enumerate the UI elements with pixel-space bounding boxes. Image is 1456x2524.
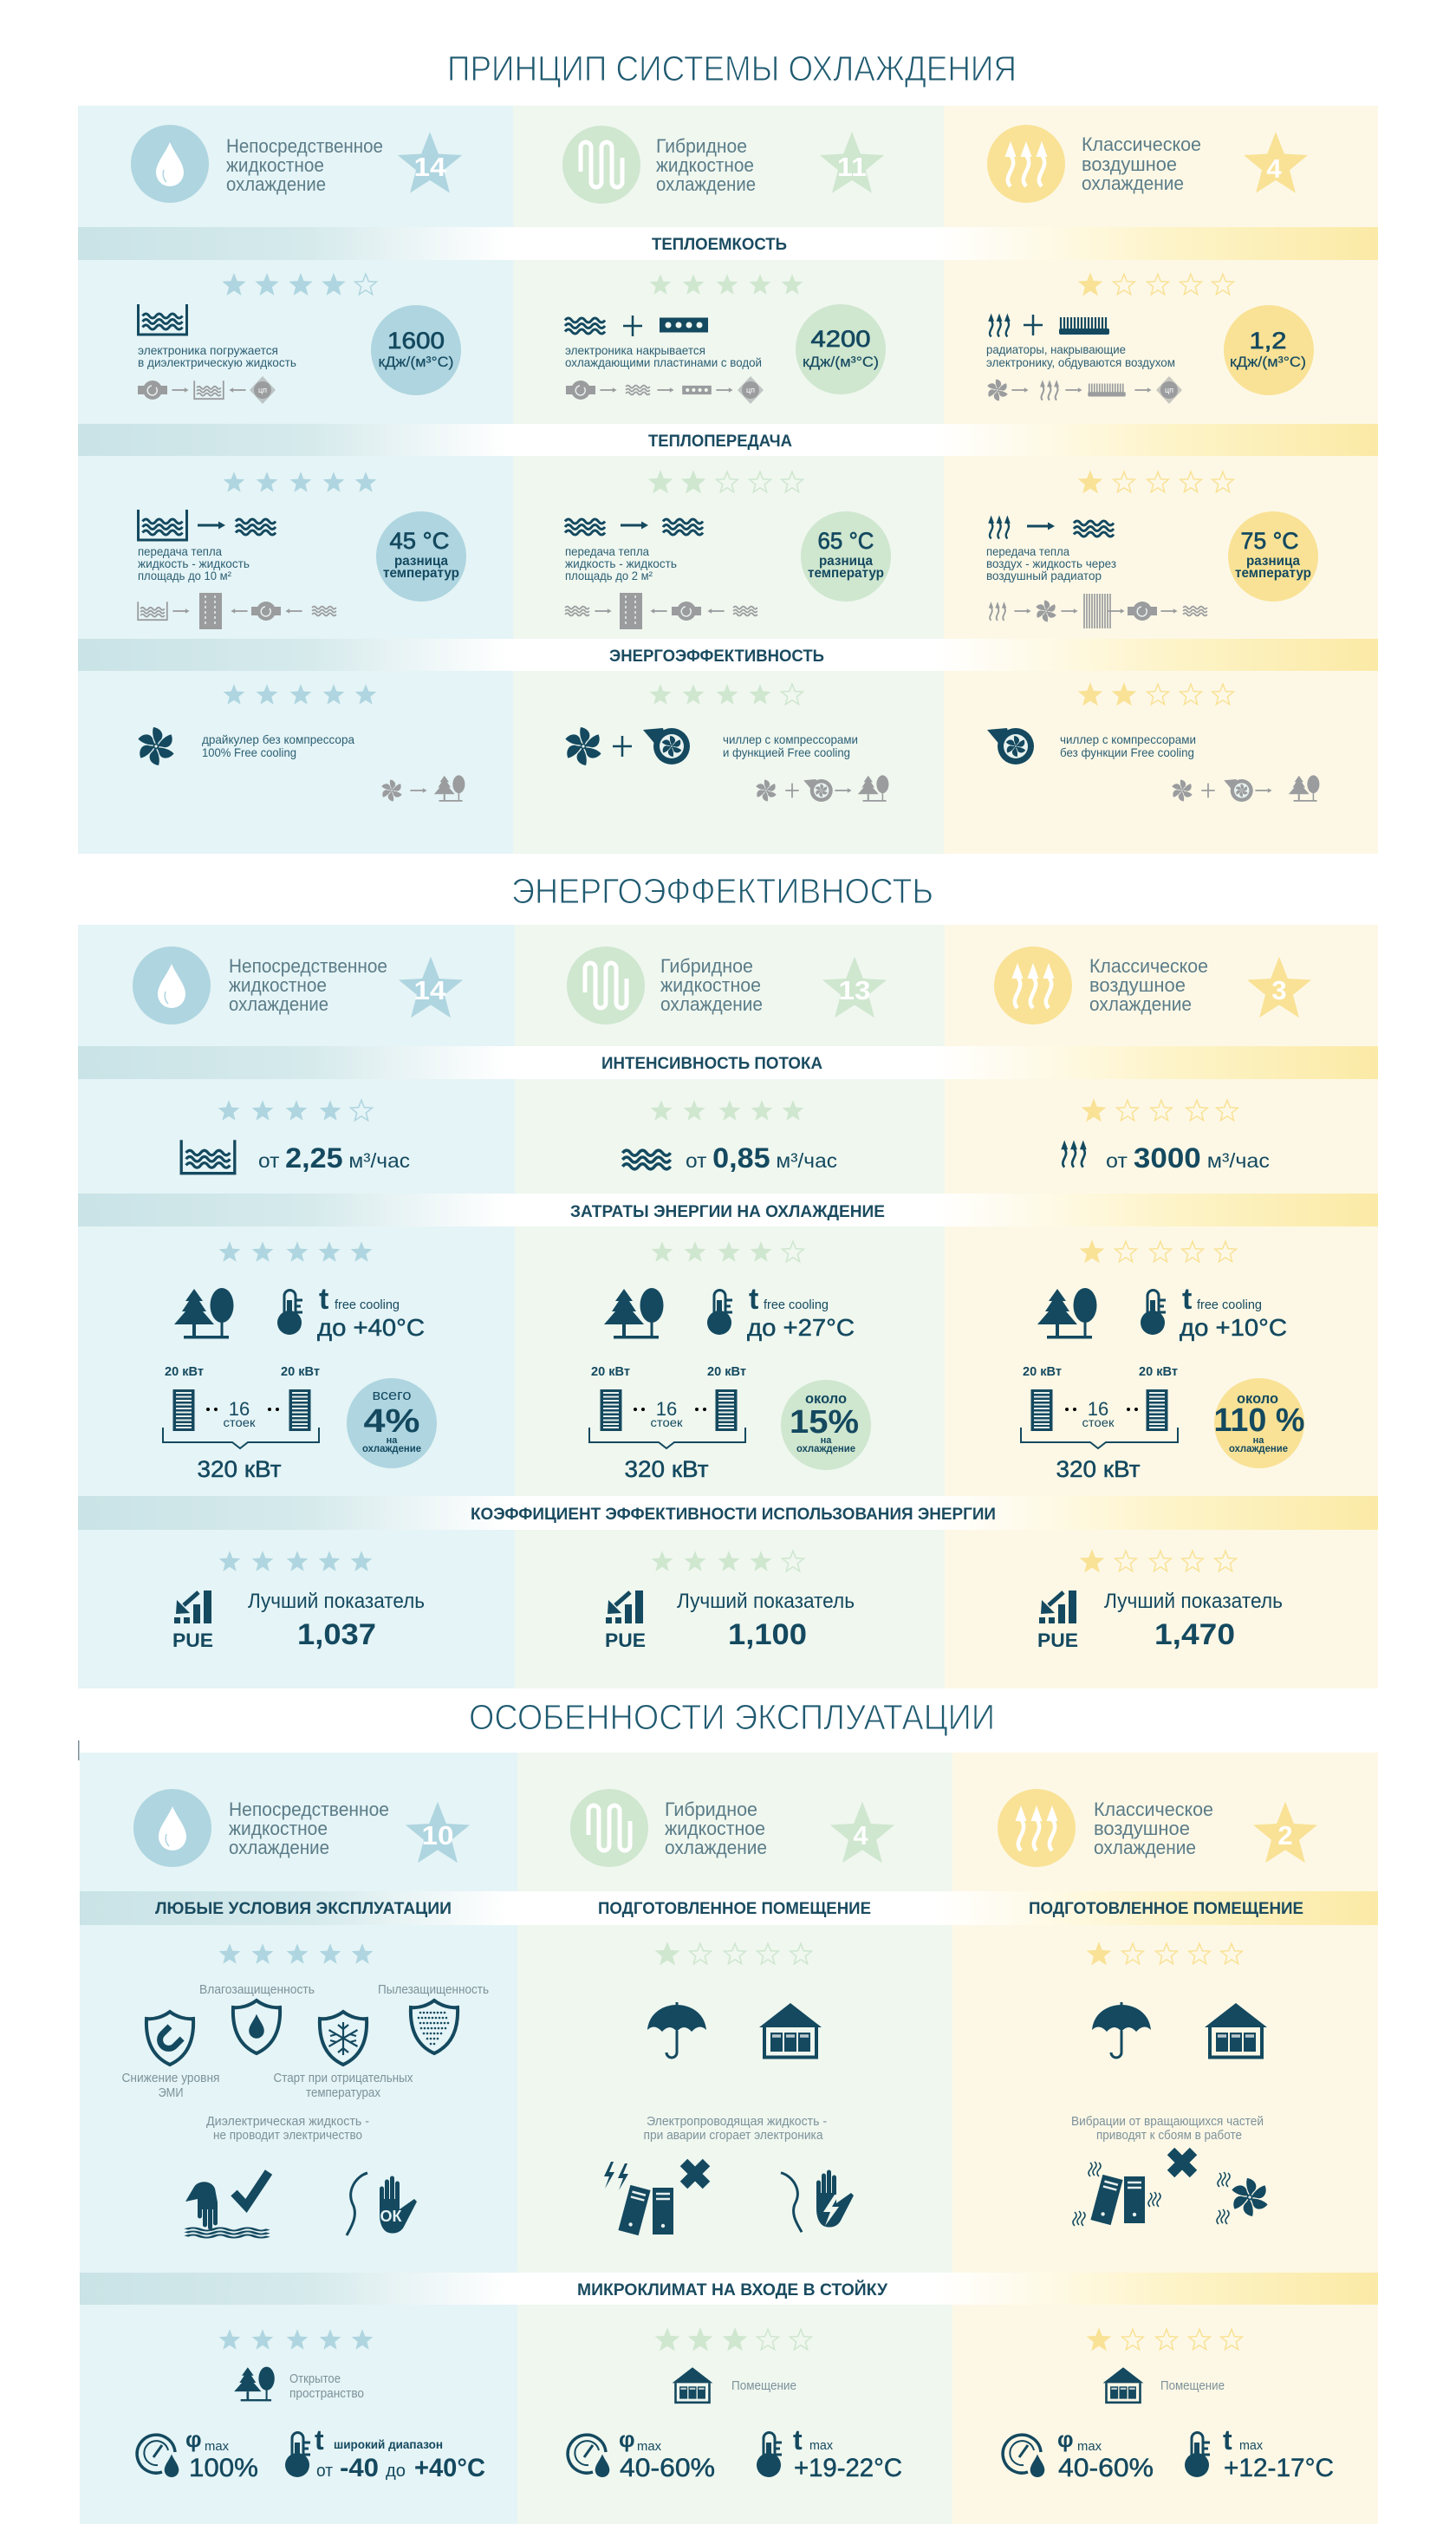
direct: protection shields: температурах (306, 2085, 380, 2100)
direct: protection shields: Влагозащищенность (199, 1982, 315, 1997)
direct: protection shields: Старт при отрицательных (274, 2071, 413, 2085)
rating stars: heat transfer direct 5 of 5 (224, 472, 376, 492)
direct: heat transfer description (138, 510, 276, 582)
rating stars: cost direct 5 of 5 (219, 1241, 372, 1262)
air: vibration note: приводят к сбоям в работе (1096, 2128, 1242, 2143)
hybrid: chiller with free cooling description: чиллер с компрессорами (723, 732, 858, 746)
panel background: classic air cooling column (944, 106, 1378, 854)
hybrid: cold plate description: охлаждающими пластинами с водой (565, 355, 762, 369)
band: rack inlet microclimate: МИКРОКЛИМАТ НА ВХОДЕ В СТОЙКУ (577, 2280, 887, 2300)
direct: drycooler description (136, 727, 354, 765)
header: hybrid liquid cooling, score 4: 4 (853, 1820, 868, 1851)
direct: heat capacity value circle (371, 305, 461, 395)
air: radiator description: электронику, обдуваются воздухом (986, 355, 1175, 369)
air: flow diagram: цп (1165, 386, 1173, 394)
direct: immersion description: электроника погружается (138, 343, 278, 357)
hybrid: cooling share circle: около (805, 1390, 847, 1407)
hybrid: heat capacity value circle: 4200 (811, 326, 870, 352)
direct: racks diagram: 16 (229, 1398, 250, 1420)
hybrid: heat transfer description (565, 519, 703, 582)
direct: protection shields (121, 1982, 489, 2100)
hybrid: conductive liquid note: при аварии сгорает электроника (643, 2128, 823, 2143)
air: vibration note: Вибрации от вращающихся частей (1071, 2114, 1264, 2129)
header: classic air cooling, score 3: 3 (1271, 975, 1287, 1005)
air: racks diagram: 16 (1088, 1398, 1108, 1420)
hybrid: chiller with free cooling description: и функцией Free cooling (723, 745, 850, 759)
direct: cooling share circle: всего (373, 1387, 411, 1403)
band: energy efficiency: ЭНЕРГОЭФФЕКТИВНОСТЬ (609, 647, 824, 666)
air: room location (1103, 2367, 1225, 2403)
direct: protection shields: Пылезащищенность (378, 1982, 489, 1997)
hybrid: humidity value: 40-60% (620, 2454, 715, 2482)
direct: temperature range value: t (315, 2424, 324, 2456)
panel: cooling principle (78, 106, 1378, 854)
direct: temperature range value (285, 2424, 485, 2482)
direct: flow diagram: цп (258, 386, 267, 394)
direct: PUE value: 1,037 (297, 1618, 376, 1651)
air: heat capacity value circle: кДж/(м³°C) (1230, 354, 1306, 370)
rating stars: conditions direct 5 of 5 (219, 1943, 373, 1964)
rating stars: conditions hybrid 1 of 5 (657, 1943, 811, 1964)
air: PUE value: 1,470 (1154, 1618, 1235, 1651)
header: direct liquid cooling, score 14: 14 (414, 152, 446, 182)
air: cooling share circle (1213, 1378, 1305, 1468)
hybrid: humidity value: φ (619, 2426, 635, 2452)
air: cooling share circle: на (1253, 1435, 1264, 1446)
band: operating conditions: ПОДГОТОВЛЕННОЕ ПОМЕЩЕНИЕ (1029, 1900, 1303, 1918)
rating stars: flow direct 4 of 5 (218, 1100, 372, 1121)
air: racks diagram: 20 кВт (1139, 1364, 1178, 1379)
rating stars: flow hybrid 5 of 5 (651, 1100, 803, 1121)
header: hybrid liquid cooling, score 4: Гибридное (665, 1799, 757, 1820)
direct: protection shields: ЭМИ (158, 2085, 184, 2100)
direct: heat capacity value circle: кДж/(м³°C) (378, 354, 454, 370)
direct: dielectric note: не проводит электричество (213, 2128, 362, 2143)
hybrid: cold plate description (565, 316, 762, 369)
air: free cooling temperature: t (1182, 1283, 1192, 1316)
rating stars: heat transfer air 1 of 5 (1080, 472, 1233, 492)
rating stars: flow air 1 of 5 (1083, 1100, 1238, 1121)
header: direct liquid cooling, score 10: жидкостное (229, 1818, 328, 1839)
rating stars: microclimate direct 5 of 5 (219, 2329, 373, 2350)
band: flow intensity: ИНТЕНСИВНОСТЬ ПОТОКА (601, 1055, 822, 1073)
rating stars: energy hybrid 4 of 5 (650, 684, 803, 705)
band: heat transfer (78, 424, 1378, 456)
hybrid: temperature value: t (793, 2424, 803, 2456)
direct: drycooler description: 100% Free cooling (202, 745, 296, 759)
air: heat transfer description: воздух - жидкость через (986, 556, 1116, 570)
icon: moisture shield with drop (233, 2000, 280, 2053)
rating stars: microclimate air 1 of 5 (1089, 2329, 1242, 2350)
header: classic air cooling, score 3: охлаждение (1089, 993, 1192, 1015)
rating stars: PUE direct 5 of 5 (219, 1551, 372, 1571)
air: temperature difference circle: температур (1235, 566, 1311, 581)
hybrid: heat capacity value circle (796, 304, 886, 394)
rating stars: cost air 1 of 5 (1082, 1241, 1236, 1262)
direct: heat transfer flow diagram (138, 593, 336, 629)
direct: PUE value: Лучший показатель (248, 1590, 425, 1613)
rating stars: energy air 2 of 5 (1080, 684, 1233, 705)
direct: temperature difference circle: разница (394, 554, 448, 569)
air: racks diagram: 20 кВт (1023, 1364, 1062, 1379)
air: heat capacity value circle: 1,2 (1250, 328, 1286, 354)
air: temperature difference circle: 75 °C (1241, 528, 1298, 554)
hybrid: racks diagram: 320 кВт (624, 1456, 709, 1482)
panel background: classic air cooling column (952, 1753, 1378, 2524)
direct: free cooling temperature: до +40°C (317, 1314, 425, 1341)
direct: temperature difference circle: температур (383, 566, 459, 581)
air: cooling share circle: около (1237, 1390, 1278, 1407)
direct: cooling share circle: на (387, 1435, 398, 1446)
hybrid: racks diagram: стоек (650, 1415, 683, 1429)
hybrid: cooling share circle: на (821, 1435, 832, 1446)
header: hybrid liquid cooling, score 11: Гибридное (656, 135, 747, 157)
air: humidity value: 40-60% (1058, 2454, 1154, 2482)
header: hybrid liquid cooling, score 13: 13 (839, 975, 870, 1005)
hybrid: conductive liquid note: Электропроводящая жидкость - (647, 2114, 827, 2129)
hybrid: flow rate (622, 1142, 837, 1174)
header: hybrid liquid cooling, score 13: Гибридное (660, 955, 753, 977)
hybrid: racks diagram: 20 кВт (707, 1364, 746, 1379)
direct: temperature difference circle (376, 511, 466, 602)
hybrid: heat transfer flow diagram (565, 593, 757, 629)
panel background: direct liquid cooling column (78, 925, 515, 1688)
hybrid: temperature value: +19-22°C (794, 2454, 902, 2482)
air: humidity value: φ (1057, 2426, 1074, 2452)
direct: open space location: пространство (289, 2386, 364, 2401)
direct: heat capacity value circle: 1600 (387, 328, 445, 354)
air: cooling share circle: 110 % (1213, 1402, 1305, 1439)
header: classic air cooling, score 3 (994, 946, 1311, 1025)
air: chiller description: без функции Free cooling (1060, 745, 1194, 759)
header: hybrid liquid cooling, score 11: охлаждение (656, 173, 756, 195)
air: racks diagram: 320 кВт (1056, 1456, 1141, 1482)
band: operating conditions: ЛЮБЫЕ УСЛОВИЯ ЭКСПЛУАТАЦИИ (155, 1900, 452, 1918)
air: flow rate: от 3000 м³/час (1106, 1142, 1270, 1174)
air: temperature value: +12-17°C (1224, 2454, 1334, 2482)
direct: humidity value (137, 2426, 258, 2482)
header: direct liquid cooling, score 10: 10 (421, 1820, 454, 1851)
direct: open space location (234, 2367, 364, 2401)
hybrid: temperature value (757, 2424, 902, 2482)
direct: temperature range value: -40 (340, 2454, 379, 2482)
rating stars: cost hybrid 4 of 5 (652, 1241, 803, 1262)
direct: immersion description (138, 304, 296, 369)
rating stars: heat transfer hybrid 2 of 5 (650, 472, 803, 492)
rating stars: PUE air 1 of 5 (1082, 1551, 1236, 1571)
direct: temperature range value: +40°C (414, 2454, 485, 2482)
rating stars: conditions air 1 of 5 (1089, 1943, 1242, 1964)
band: heat capacity: ТЕПЛОЕМКОСТЬ (652, 236, 787, 254)
band: power usage effectiveness: КОЭФФИЦИЕНТ ЭФФЕКТИВНОСТИ ИСПОЛЬЗОВАНИЯ ЭНЕРГИИ (471, 1506, 996, 1524)
band: power usage effectiveness (78, 1496, 1378, 1530)
direct: dielectric note: Диэлектрическая жидкость - (206, 2114, 369, 2129)
hybrid: heat transfer description: площадь до 2 м² (565, 569, 653, 582)
panel background: hybrid liquid cooling column (513, 106, 944, 854)
direct: free cooling temperature (174, 1283, 425, 1341)
direct: cable and safe hand: ОК (380, 2208, 403, 2225)
header: classic air cooling, score 2 (998, 1789, 1317, 1867)
header: classic air cooling, score 3: Классическое (1089, 955, 1208, 977)
direct: free cooling temperature: t (319, 1283, 328, 1316)
band: cooling energy cost (78, 1194, 1378, 1226)
direct: drycooler description: драйкулер без компрессора (202, 732, 354, 746)
hybrid: free cooling temperature: t (749, 1283, 758, 1316)
direct: hand in liquid with check mark (185, 2172, 269, 2238)
header: direct liquid cooling, score 10 (133, 1789, 470, 1867)
hybrid: energy flow diagram (755, 775, 888, 802)
direct: immersion description: в диэлектрическую жидкость (138, 355, 296, 369)
header: direct liquid cooling, score 14: 14 (414, 975, 446, 1005)
rating stars: heat capacity air 1 of 5 (1080, 274, 1233, 295)
air: heat transfer flow diagram (989, 594, 1207, 628)
hybrid: free cooling temperature: до +27°C (747, 1314, 855, 1341)
panel: energy efficiency (78, 925, 1378, 1688)
hybrid: cooling share circle: 15% (790, 1404, 859, 1441)
header: direct liquid cooling, score 14: жидкостное (229, 974, 327, 996)
band: energy efficiency (78, 639, 1378, 671)
hybrid: temperature value: max (809, 2438, 833, 2453)
hybrid: cooling share circle: охлаждение (796, 1442, 855, 1454)
air: radiator description: радиаторы, накрывающие (986, 342, 1126, 356)
direct: dielectric note (206, 2114, 369, 2143)
air: flow diagram (986, 376, 1182, 404)
band: heat transfer: ТЕПЛОПЕРЕДАЧА (648, 433, 792, 451)
hybrid: flow diagram (566, 376, 764, 404)
hybrid: PUE value: 1,100 (728, 1618, 807, 1651)
header: classic air cooling, score 4: воздушное (1082, 153, 1177, 175)
direct: protection shields: Снижение уровня (121, 2071, 220, 2085)
hybrid: cold plate description: электроника накрывается (565, 343, 705, 357)
hybrid: humidity value: max (637, 2439, 661, 2454)
header: classic air cooling, score 2: охлаждение (1094, 1837, 1196, 1858)
hybrid: PUE value (605, 1590, 855, 1651)
hybrid: cooling share circle (781, 1380, 871, 1470)
band: flow intensity (78, 1046, 1378, 1079)
air: humidity value: max (1077, 2439, 1102, 2454)
direct: flow rate (181, 1140, 410, 1174)
air: humidity value (1003, 2426, 1154, 2482)
hybrid: burning servers with cross (604, 2162, 706, 2235)
hybrid: humidity value (568, 2426, 715, 2482)
direct: cooling share circle: 4% (364, 1403, 419, 1440)
air: radiator description (986, 313, 1175, 369)
air: umbrella and house icons (1092, 2002, 1267, 2058)
hybrid: racks diagram (589, 1364, 746, 1482)
air: heat transfer description: передача тепла (986, 544, 1069, 558)
band: heat capacity (78, 227, 1378, 260)
panel background: hybrid liquid cooling column (517, 1753, 952, 2524)
hybrid: conductive liquid note (643, 2114, 827, 2143)
rating stars: PUE hybrid 4 of 5 (652, 1551, 803, 1571)
panel background: direct liquid cooling column (80, 1753, 517, 2524)
header: classic air cooling, score 4: 4 (1266, 153, 1282, 184)
hybrid: PUE value: PUE (605, 1630, 646, 1651)
direct: flow diagram (138, 376, 276, 404)
air: temperature difference circle: разница (1246, 554, 1300, 569)
direct: flow rate: от 2,25 м³/час (258, 1142, 410, 1174)
hybrid: temperature difference circle (801, 511, 891, 602)
direct: temperature range value: до (386, 2462, 406, 2481)
direct: heat transfer description: передача тепла (138, 544, 222, 558)
air: chiller description: чиллер с компрессорами (1060, 732, 1196, 746)
direct: racks diagram: 20 кВт (281, 1364, 320, 1379)
header: direct liquid cooling, score 14: охлаждение (226, 173, 326, 195)
direct: PUE value (172, 1590, 425, 1651)
air: energy flow diagram (1171, 775, 1319, 802)
air: racks diagram (1021, 1364, 1178, 1482)
hybrid: racks diagram: 16 (656, 1398, 677, 1420)
panel: operating features (80, 1753, 1378, 2524)
air: free cooling temperature: free cooling (1197, 1298, 1262, 1312)
header: classic air cooling, score 3: воздушное (1089, 974, 1186, 996)
air: PUE value: Лучший показатель (1104, 1590, 1283, 1613)
hybrid: temperature difference circle: температур (808, 566, 884, 581)
air: temperature difference circle (1228, 511, 1318, 602)
hybrid: chiller with free cooling description (563, 727, 858, 765)
direct: cable and safe hand (347, 2173, 417, 2235)
band: operating conditions (80, 1891, 1378, 1925)
header: hybrid liquid cooling, score 4 (570, 1789, 894, 1867)
header: direct liquid cooling, score 14: Непосредственное (229, 955, 387, 977)
direct: racks diagram: 20 кВт (165, 1364, 204, 1379)
header: hybrid liquid cooling, score 13: жидкостное (660, 974, 761, 996)
header: direct liquid cooling, score 14: жидкостное (226, 154, 324, 176)
air: heat transfer description: воздушный радиатор (986, 569, 1102, 582)
direct: open space location: Открытое (289, 2371, 341, 2386)
direct: heat transfer description: жидкость - жидкость (138, 556, 250, 570)
rating stars: microclimate hybrid 3 of 5 (657, 2329, 811, 2350)
air: vibration note (1071, 2114, 1264, 2143)
rating stars: heat capacity direct 4 of 5 (224, 274, 376, 295)
air: heat capacity value circle (1224, 305, 1314, 395)
direct: cooling share circle: охлаждение (362, 1442, 421, 1454)
panel background: classic air cooling column (945, 925, 1378, 1688)
panel background: direct liquid cooling column (78, 106, 513, 854)
air: racks diagram: стоек (1082, 1415, 1115, 1429)
hybrid: heat capacity value circle: кДж/(м³°C) (803, 354, 879, 370)
icon: dust shield with dots (411, 2000, 458, 2053)
air: temperature value (1185, 2424, 1334, 2482)
direct: temperature difference circle: 45 °C (390, 528, 449, 554)
header: direct liquid cooling, score 14 (131, 125, 462, 203)
band: operating conditions: ПОДГОТОВЛЕННОЕ ПОМЕЩЕНИЕ (598, 1900, 871, 1918)
icon: frost shield with snowflake (320, 2012, 367, 2065)
hybrid: umbrella and house icons (647, 2002, 822, 2058)
air: temperature value: t (1223, 2424, 1232, 2456)
air: chiller description (987, 728, 1196, 764)
header: classic air cooling, score 2: воздушное (1094, 1818, 1190, 1839)
hybrid: flow rate: от 0,85 м³/час (686, 1142, 837, 1174)
header: hybrid liquid cooling, score 13 (567, 946, 887, 1025)
section 1 title: ПРИНЦИП СИСТЕМЫ ОХЛАЖДЕНИЯ (447, 49, 1017, 88)
hybrid: free cooling temperature: free cooling (764, 1298, 829, 1312)
band: cooling energy cost: ЗАТРАТЫ ЭНЕРГИИ НА ОХЛАЖДЕНИЕ (570, 1203, 885, 1221)
hybrid: racks diagram: 20 кВт (591, 1364, 630, 1379)
header: hybrid liquid cooling, score 11: 11 (837, 152, 867, 182)
direct: free cooling temperature: free cooling (335, 1298, 400, 1312)
header: classic air cooling, score 4: охлаждение (1082, 172, 1184, 194)
direct: racks diagram (163, 1364, 320, 1482)
air: PUE value (1037, 1590, 1283, 1651)
hybrid: room location: Помещение (731, 2378, 796, 2393)
hybrid: temperature difference circle: разница (819, 554, 873, 569)
direct: racks diagram: стоек (224, 1415, 256, 1429)
hybrid: cable and shocked hand (781, 2170, 854, 2232)
header: direct liquid cooling, score 14: охлаждение (229, 993, 328, 1015)
header: direct liquid cooling, score 10: Непосредственное (229, 1799, 389, 1820)
header: direct liquid cooling, score 14 (133, 946, 463, 1025)
direct: humidity value: φ (185, 2426, 202, 2452)
hybrid: heat transfer description: передача тепла (565, 544, 649, 558)
direct: heat transfer description: площадь до 10 м² (138, 569, 231, 582)
header: hybrid liquid cooling, score 11: жидкостное (656, 154, 754, 176)
header: hybrid liquid cooling, score 4: жидкостное (665, 1818, 765, 1839)
header: classic air cooling, score 2: 2 (1277, 1820, 1293, 1851)
rating stars: heat capacity hybrid 5 of 5 (650, 274, 803, 295)
icon: EMI shield with magnet (146, 2012, 193, 2065)
air: cooling share circle: охлаждение (1229, 1442, 1288, 1454)
air: free cooling temperature (1037, 1283, 1287, 1341)
header: hybrid liquid cooling, score 4: охлаждение (665, 1837, 767, 1858)
hybrid: PUE value: Лучший показатель (677, 1590, 855, 1613)
direct: PUE value: PUE (172, 1630, 213, 1651)
header: direct liquid cooling, score 14: Непосредственное (226, 135, 383, 157)
header: hybrid liquid cooling, score 11 (562, 126, 884, 204)
direct: energy flow diagram (380, 775, 465, 802)
air: room location: Помещение (1160, 2378, 1225, 2393)
direct: humidity value: max (205, 2439, 229, 2454)
hybrid: heat transfer description: жидкость - жидкость (565, 556, 677, 570)
band: rack inlet microclimate (80, 2273, 1378, 2305)
header: classic air cooling, score 2: Классическое (1094, 1799, 1213, 1820)
hybrid: room location (673, 2367, 796, 2403)
air: heat transfer description (986, 515, 1116, 582)
hybrid: flow diagram: цп (746, 386, 755, 394)
direct: temperature range value: от (316, 2462, 333, 2481)
direct: racks diagram: 320 кВт (198, 1456, 281, 1482)
panel background: hybrid liquid cooling column (515, 925, 945, 1688)
direct: cooling share circle (347, 1378, 437, 1468)
air: PUE value: PUE (1037, 1630, 1078, 1651)
direct: humidity value: 100% (189, 2454, 258, 2482)
direct: temperature range value: широкий диапазон (334, 2437, 443, 2451)
air: free cooling temperature: до +10°C (1180, 1314, 1287, 1341)
section 3 title: ОСОБЕННОСТИ ЭКСПЛУАТАЦИИ (469, 1697, 995, 1737)
header: direct liquid cooling, score 10: охлаждение (229, 1837, 329, 1858)
rating stars: energy direct 5 of 5 (224, 684, 376, 705)
header: hybrid liquid cooling, score 13: охлаждение (660, 993, 763, 1015)
air: temperature value: max (1239, 2438, 1263, 2453)
section 2 title: ЭНЕРГОЭФФЕКТИВНОСТЬ (511, 871, 933, 911)
header: classic air cooling, score 4 (987, 125, 1308, 203)
hybrid: temperature difference circle: 65 °C (818, 528, 874, 554)
hybrid: free cooling temperature (604, 1283, 855, 1341)
air: vibrating servers and fan with cross (1073, 2151, 1270, 2226)
header: classic air cooling, score 4: Классическое (1082, 133, 1201, 155)
